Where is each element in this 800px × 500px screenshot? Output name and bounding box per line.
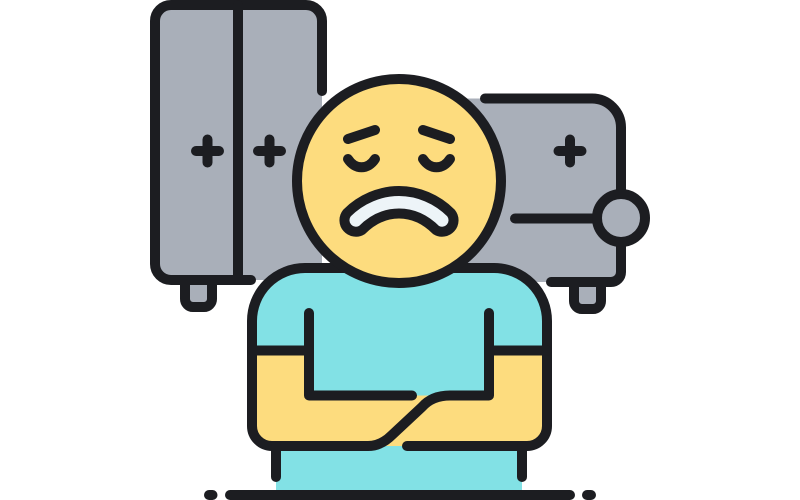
right door handle plus bbox=[258, 140, 281, 162]
left eyebrow bbox=[348, 130, 375, 139]
left sleeve hem bbox=[252, 346, 309, 356]
ground line bbox=[209, 490, 591, 500]
left cabinet outline bbox=[155, 5, 322, 280]
right cabinet bbox=[450, 98, 645, 309]
right closed eye bbox=[423, 159, 450, 167]
right cabinet body fill bbox=[450, 98, 621, 282]
cabinet door divider bbox=[233, 5, 243, 280]
ground left dot bbox=[209, 490, 212, 500]
left waist line bbox=[271, 446, 281, 477]
crossed arms fill bbox=[252, 350, 547, 446]
person body bbox=[252, 268, 547, 492]
left inner arm line bbox=[309, 313, 412, 396]
shirt torso fill bbox=[252, 268, 547, 400]
left cabinet foot bbox=[185, 280, 212, 307]
right sleeve hem bbox=[489, 346, 547, 356]
right cabinet round knob bbox=[597, 194, 645, 242]
left cabinet bbox=[155, 5, 322, 307]
body outline bbox=[252, 268, 489, 446]
right cabinet foot bbox=[574, 282, 601, 309]
left closed eye bbox=[348, 159, 375, 167]
right eyebrow bbox=[423, 130, 450, 139]
right waist line bbox=[517, 446, 527, 477]
frowning mouth bbox=[344, 191, 454, 232]
left door handle plus bbox=[196, 140, 219, 162]
head bbox=[297, 79, 501, 283]
right cabinet plus bbox=[558, 140, 582, 162]
lower shirt bbox=[276, 440, 522, 492]
ground main line bbox=[230, 490, 570, 500]
right side outline bbox=[407, 268, 547, 446]
left cabinet body fill bbox=[155, 5, 322, 280]
sad face bbox=[297, 79, 501, 283]
right cabinet outline bbox=[485, 98, 621, 282]
ground right dot bbox=[587, 490, 591, 500]
right cabinet handle bar bbox=[515, 214, 597, 224]
